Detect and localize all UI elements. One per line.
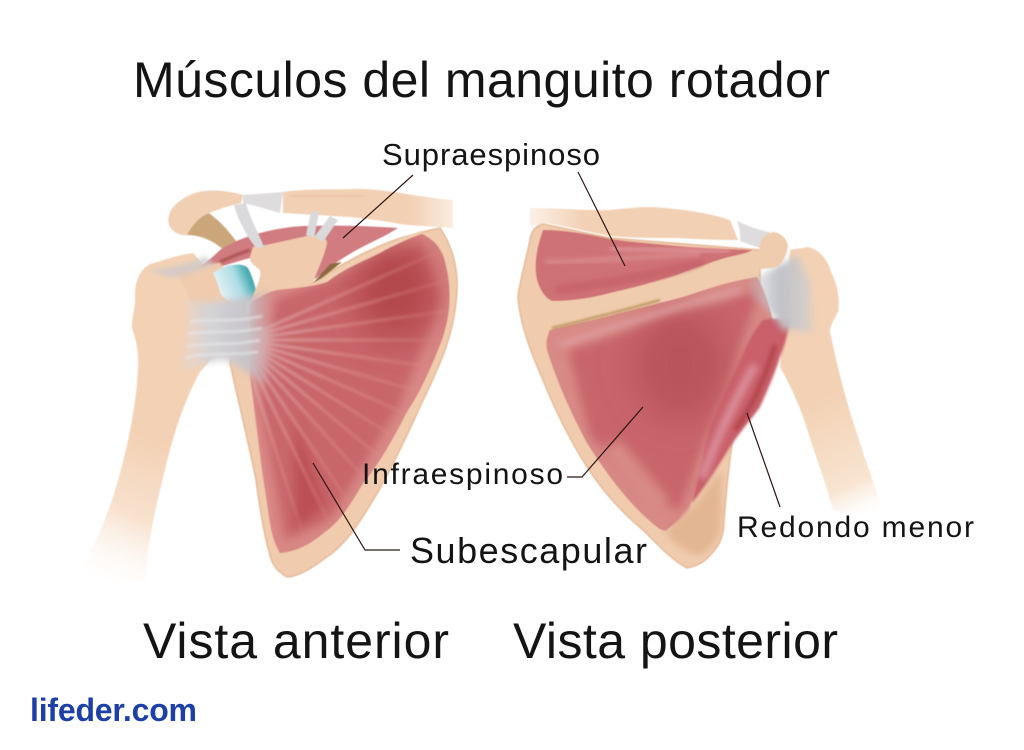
scapular rim highlight <box>327 232 422 280</box>
glenoid cartilage <box>213 265 257 304</box>
glenoid bone <box>175 262 242 330</box>
scapular notch shadow <box>313 262 342 283</box>
label: Redondo menor: Redondo menor <box>737 511 974 544</box>
supraspinatus shading <box>184 250 250 278</box>
scapula, anterior <box>230 228 457 577</box>
acromion hook <box>168 190 245 262</box>
acromioclavicular ligament <box>737 221 770 248</box>
clavicle, anterior <box>283 189 453 228</box>
scapula, posterior <box>518 224 760 568</box>
clavicle highlight <box>290 195 365 197</box>
title: Músculos del manguito rotador <box>133 52 830 108</box>
illustration: posterior view of the shoulder <box>518 207 884 568</box>
heading: Vista posterior: Vista posterior <box>513 613 838 669</box>
label: Supraespinoso: Supraespinoso <box>382 137 600 172</box>
ligaments <box>234 192 338 248</box>
humerus, anterior <box>72 253 235 585</box>
teres minor muscle <box>667 318 790 528</box>
label: Infraespinoso: Infraespinoso <box>362 458 563 491</box>
infraspinatus muscle <box>546 276 773 531</box>
supraspinatus fibres <box>545 248 730 290</box>
grey tendon over greater tuberosity <box>150 256 215 278</box>
rotator cuff tendon, posterior <box>750 255 818 336</box>
brand: lifeder.com: lifeder.com <box>30 692 197 728</box>
supraspinatus, posterior <box>536 230 752 301</box>
supraspinatus, anterior <box>182 226 398 290</box>
clavicle, posterior <box>530 207 738 240</box>
lower scapular shading <box>665 470 722 555</box>
radial fibres <box>250 259 432 524</box>
coracoid process <box>250 235 327 302</box>
subscapularis muscle <box>250 234 450 554</box>
illustration: anterior view of the shoulder <box>92 188 458 578</box>
subscapularis tendon <box>180 288 280 385</box>
heading: Vista anterior: Vista anterior <box>143 613 449 669</box>
scapular spine <box>548 232 788 328</box>
humerus, posterior <box>780 247 884 513</box>
label: Subescapular: Subescapular <box>410 530 647 571</box>
leader lines <box>313 172 780 550</box>
spine shadow <box>552 300 660 328</box>
